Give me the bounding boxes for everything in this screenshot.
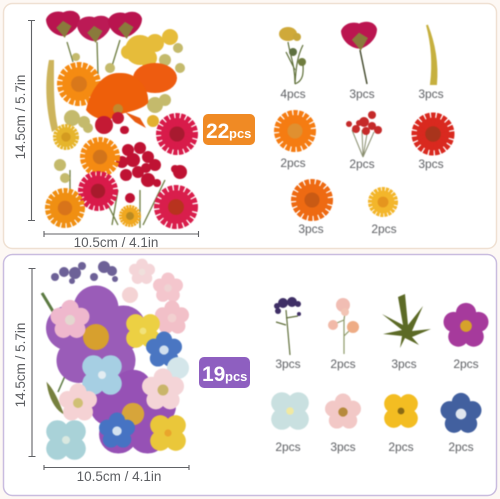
badge: 22pcs <box>203 114 255 145</box>
badge: 22pcs: pcs <box>229 126 251 141</box>
panel: purple flower set <box>4 254 496 496</box>
item: rose, 3pcs: 3pcs <box>349 87 375 101</box>
item: yellow daisy, 2pcs <box>371 191 397 236</box>
badge: 19pcs <box>199 357 250 388</box>
width dimension line <box>44 231 198 237</box>
item: red sprig, 2pcs <box>346 111 382 171</box>
item: green leaf, 3pcs <box>382 294 431 371</box>
badge: 22pcs: 22 <box>206 120 229 143</box>
item: pink sprig, 2pcs <box>328 298 359 371</box>
item: pink sprig, 2pcs: 2pcs <box>330 357 356 371</box>
item: purple sprig, 3pcs: 3pcs <box>275 357 301 371</box>
item: magenta flower, 2pcs <box>444 303 488 371</box>
badge: 19pcs: 19 <box>202 363 225 386</box>
item: blue flower, 2pcs <box>440 393 482 454</box>
item: orange daisy, 3pcs: 3pcs <box>298 222 324 236</box>
item: yellow pansy, 2pcs: 2pcs <box>388 440 414 454</box>
panel: orange flower set <box>4 4 496 250</box>
flower arrangement: purple and blue <box>42 259 189 460</box>
item: pale pink flower, 3pcs <box>325 393 361 454</box>
item: red daisy, 3pcs: 3pcs <box>418 157 444 171</box>
item: orange daisy, 2pcs: 2pcs <box>280 156 306 170</box>
item: yellow spike, 3pcs: 3pcs <box>418 87 444 101</box>
item: orange daisy, 2pcs <box>279 115 311 170</box>
item: rose, 3pcs <box>341 22 377 101</box>
item: red sprig, 2pcs: 2pcs <box>349 157 375 171</box>
height label: 14.5cm / 5.7in <box>13 323 28 407</box>
height dimension line <box>28 20 35 220</box>
badge: 19pcs: pcs <box>225 369 247 384</box>
item: red daisy, 3pcs <box>417 118 449 171</box>
item: magenta flower, 2pcs: 2pcs <box>453 357 479 371</box>
item: yellow daisy, 2pcs: 2pcs <box>371 222 397 236</box>
height dimension line <box>28 268 36 456</box>
item: yellow wildflower, 4pcs: 4pcs <box>280 87 306 101</box>
width label: 10.5cm / 4.1in <box>74 235 158 250</box>
item: purple sprig, 3pcs <box>274 297 301 371</box>
item: green leaf, 3pcs: 3pcs <box>391 357 417 371</box>
item: orange daisy, 3pcs <box>296 184 328 236</box>
item: yellow pansy, 2pcs <box>384 394 418 454</box>
item: pale blue flower, 2pcs: 2pcs <box>275 440 301 454</box>
flower arrangement: orange and red <box>46 11 193 228</box>
item: pale pink flower, 3pcs: 3pcs <box>330 440 356 454</box>
item: yellow spike, 3pcs <box>418 25 444 101</box>
width label: 10.5cm / 4.1in <box>77 469 161 484</box>
item: yellow wildflower, 4pcs <box>279 27 306 101</box>
height label: 14.5cm / 5.7in <box>13 75 28 159</box>
item: pale blue flower, 2pcs <box>271 392 309 454</box>
width dimension line <box>44 465 189 470</box>
item: blue flower, 2pcs: 2pcs <box>448 440 474 454</box>
